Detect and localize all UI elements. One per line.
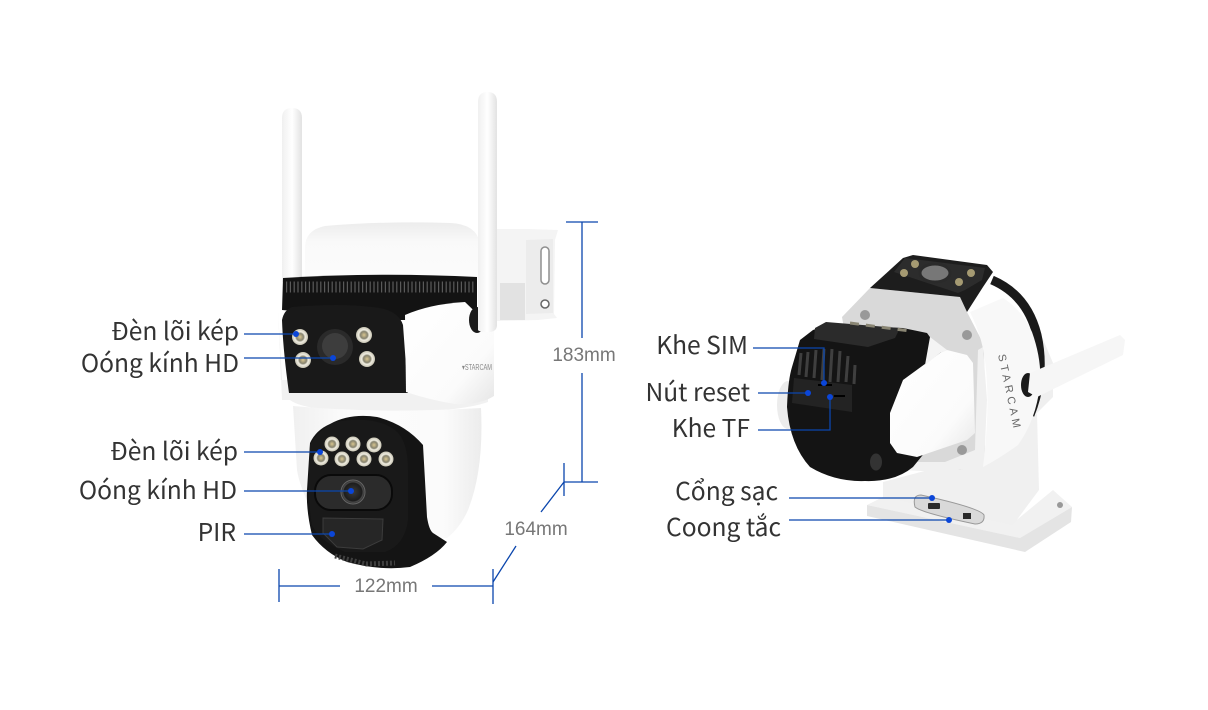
upright	[883, 413, 1039, 525]
callout lines: rear view	[753, 348, 952, 523]
lower LEDs	[314, 436, 394, 466]
bracket	[497, 229, 558, 321]
label: Oóng kính HD upper: Oóng kính HD	[81, 344, 239, 380]
dimension: 183mm: 183mm	[552, 345, 616, 366]
head LEDs	[850, 323, 910, 331]
collar	[278, 310, 488, 412]
base plate	[867, 490, 1072, 552]
right antenna	[469, 92, 497, 333]
black camera head	[787, 325, 945, 481]
left antenna	[282, 108, 302, 282]
label: Khe TF: Khe TF	[672, 409, 750, 445]
label: Cổng sạc: Cổng sạc	[675, 472, 778, 508]
white arm rear	[890, 350, 975, 457]
lower lens window	[315, 475, 392, 510]
black back band	[992, 280, 1040, 415]
top camera	[870, 255, 993, 312]
vents	[799, 349, 855, 384]
sim and tf slots	[818, 385, 845, 396]
screw holes	[860, 310, 972, 455]
top dome	[305, 222, 480, 278]
gray rim highlight	[900, 347, 987, 472]
arm neck	[925, 337, 947, 365]
camera: front view	[278, 92, 558, 568]
dimension: 122mm	[279, 569, 493, 604]
upper black face	[282, 305, 408, 393]
dimension: 164mm: 164mm	[504, 519, 568, 540]
dimension: 122mm: 122mm	[354, 576, 418, 597]
PIR window	[323, 518, 383, 549]
label: Đèn lõi kép lower: Đèn lõi kép	[110, 432, 238, 468]
top lips	[814, 322, 900, 347]
callout lines: front view	[244, 331, 354, 537]
lower face inner	[309, 420, 408, 552]
white arm	[405, 302, 494, 404]
label: PIR: PIR	[198, 513, 236, 549]
camera: rear view	[777, 255, 1125, 552]
white side band	[970, 298, 1040, 467]
logo side: STARCAM	[995, 353, 1022, 429]
left ghost shell	[777, 381, 799, 429]
logo: ▾STARCAM	[462, 363, 492, 372]
vent	[335, 556, 395, 564]
rear antenna	[1021, 335, 1125, 397]
gray rear disc	[842, 288, 985, 470]
black ring	[282, 275, 477, 320]
label: Coong tắc: Coong tắc	[666, 508, 781, 544]
dimension: 164mm	[493, 463, 568, 582]
upper lens	[317, 329, 353, 365]
screw hole	[870, 454, 882, 470]
lower black face	[307, 416, 447, 568]
outer right shell	[1000, 320, 1053, 420]
dimension: 183mm	[552, 222, 616, 482]
port panel	[914, 495, 984, 524]
slot panel	[792, 378, 852, 412]
upper LEDs	[292, 327, 375, 368]
lower body white	[293, 406, 481, 540]
label: Đèn lõi kép upper: Đèn lõi kép	[111, 312, 239, 348]
label: Oóng kính HD lower: Oóng kính HD	[79, 471, 237, 507]
label: Nút reset: Nút reset	[645, 373, 750, 409]
label: Khe SIM: Khe SIM	[656, 326, 748, 362]
